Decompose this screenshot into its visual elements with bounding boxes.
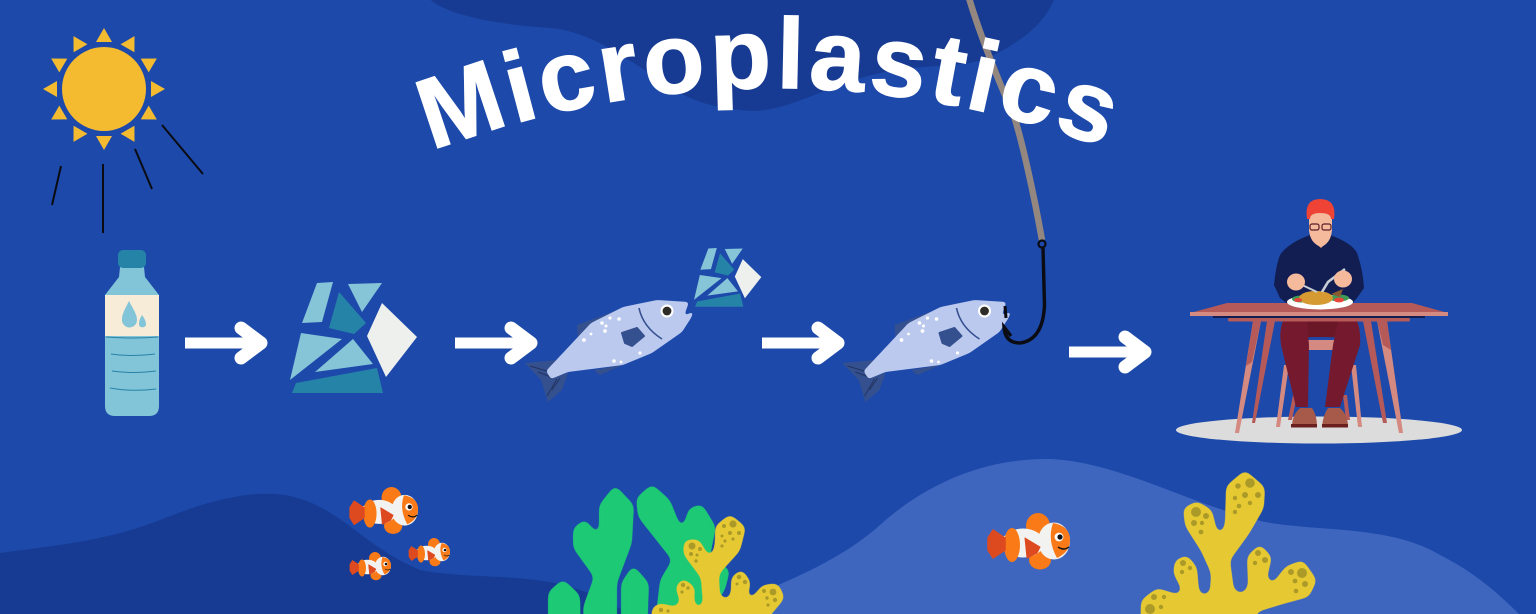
top dark water blob <box>426 0 1056 111</box>
fishing line <box>969 0 1042 240</box>
arrow: hooked fish to person <box>1069 337 1145 367</box>
person eating fish at table <box>1176 199 1462 444</box>
table top <box>1190 303 1448 322</box>
shoes <box>1291 408 1348 428</box>
clownfish: small right <box>409 538 450 566</box>
bottom left dark seabed <box>0 494 640 614</box>
icon: hook <box>1004 240 1046 343</box>
green seaweed <box>548 484 730 614</box>
yellow coral: centre <box>650 514 785 614</box>
trousers <box>1280 321 1360 407</box>
clownfish: large <box>988 513 1070 570</box>
icon: fish eating plastic <box>525 300 694 402</box>
arrow: fragments to fish <box>455 328 531 358</box>
clownfish: upper left <box>350 487 418 534</box>
hands and cutlery <box>1287 269 1352 292</box>
chair <box>1276 340 1362 427</box>
bottom right light seabed <box>700 459 1525 614</box>
icon: small plastic fragments <box>694 248 761 307</box>
arrow: fish to hooked fish <box>762 328 838 358</box>
icon: plastic bottle <box>105 250 159 416</box>
plate of fish <box>1287 289 1353 310</box>
floor shadow <box>1176 416 1462 444</box>
icon: sun <box>43 28 165 150</box>
head <box>1307 199 1334 248</box>
title: Microplastics <box>416 15 1113 149</box>
arrow: bottle to fragments <box>185 328 261 358</box>
torso <box>1274 235 1364 306</box>
icon: hooked fish <box>842 300 1012 402</box>
yellow coral: right <box>1140 470 1317 614</box>
clownfish: small left <box>350 552 391 580</box>
sun rays <box>52 125 203 233</box>
icon: plastic fragments <box>290 282 417 393</box>
table legs <box>1235 321 1403 433</box>
